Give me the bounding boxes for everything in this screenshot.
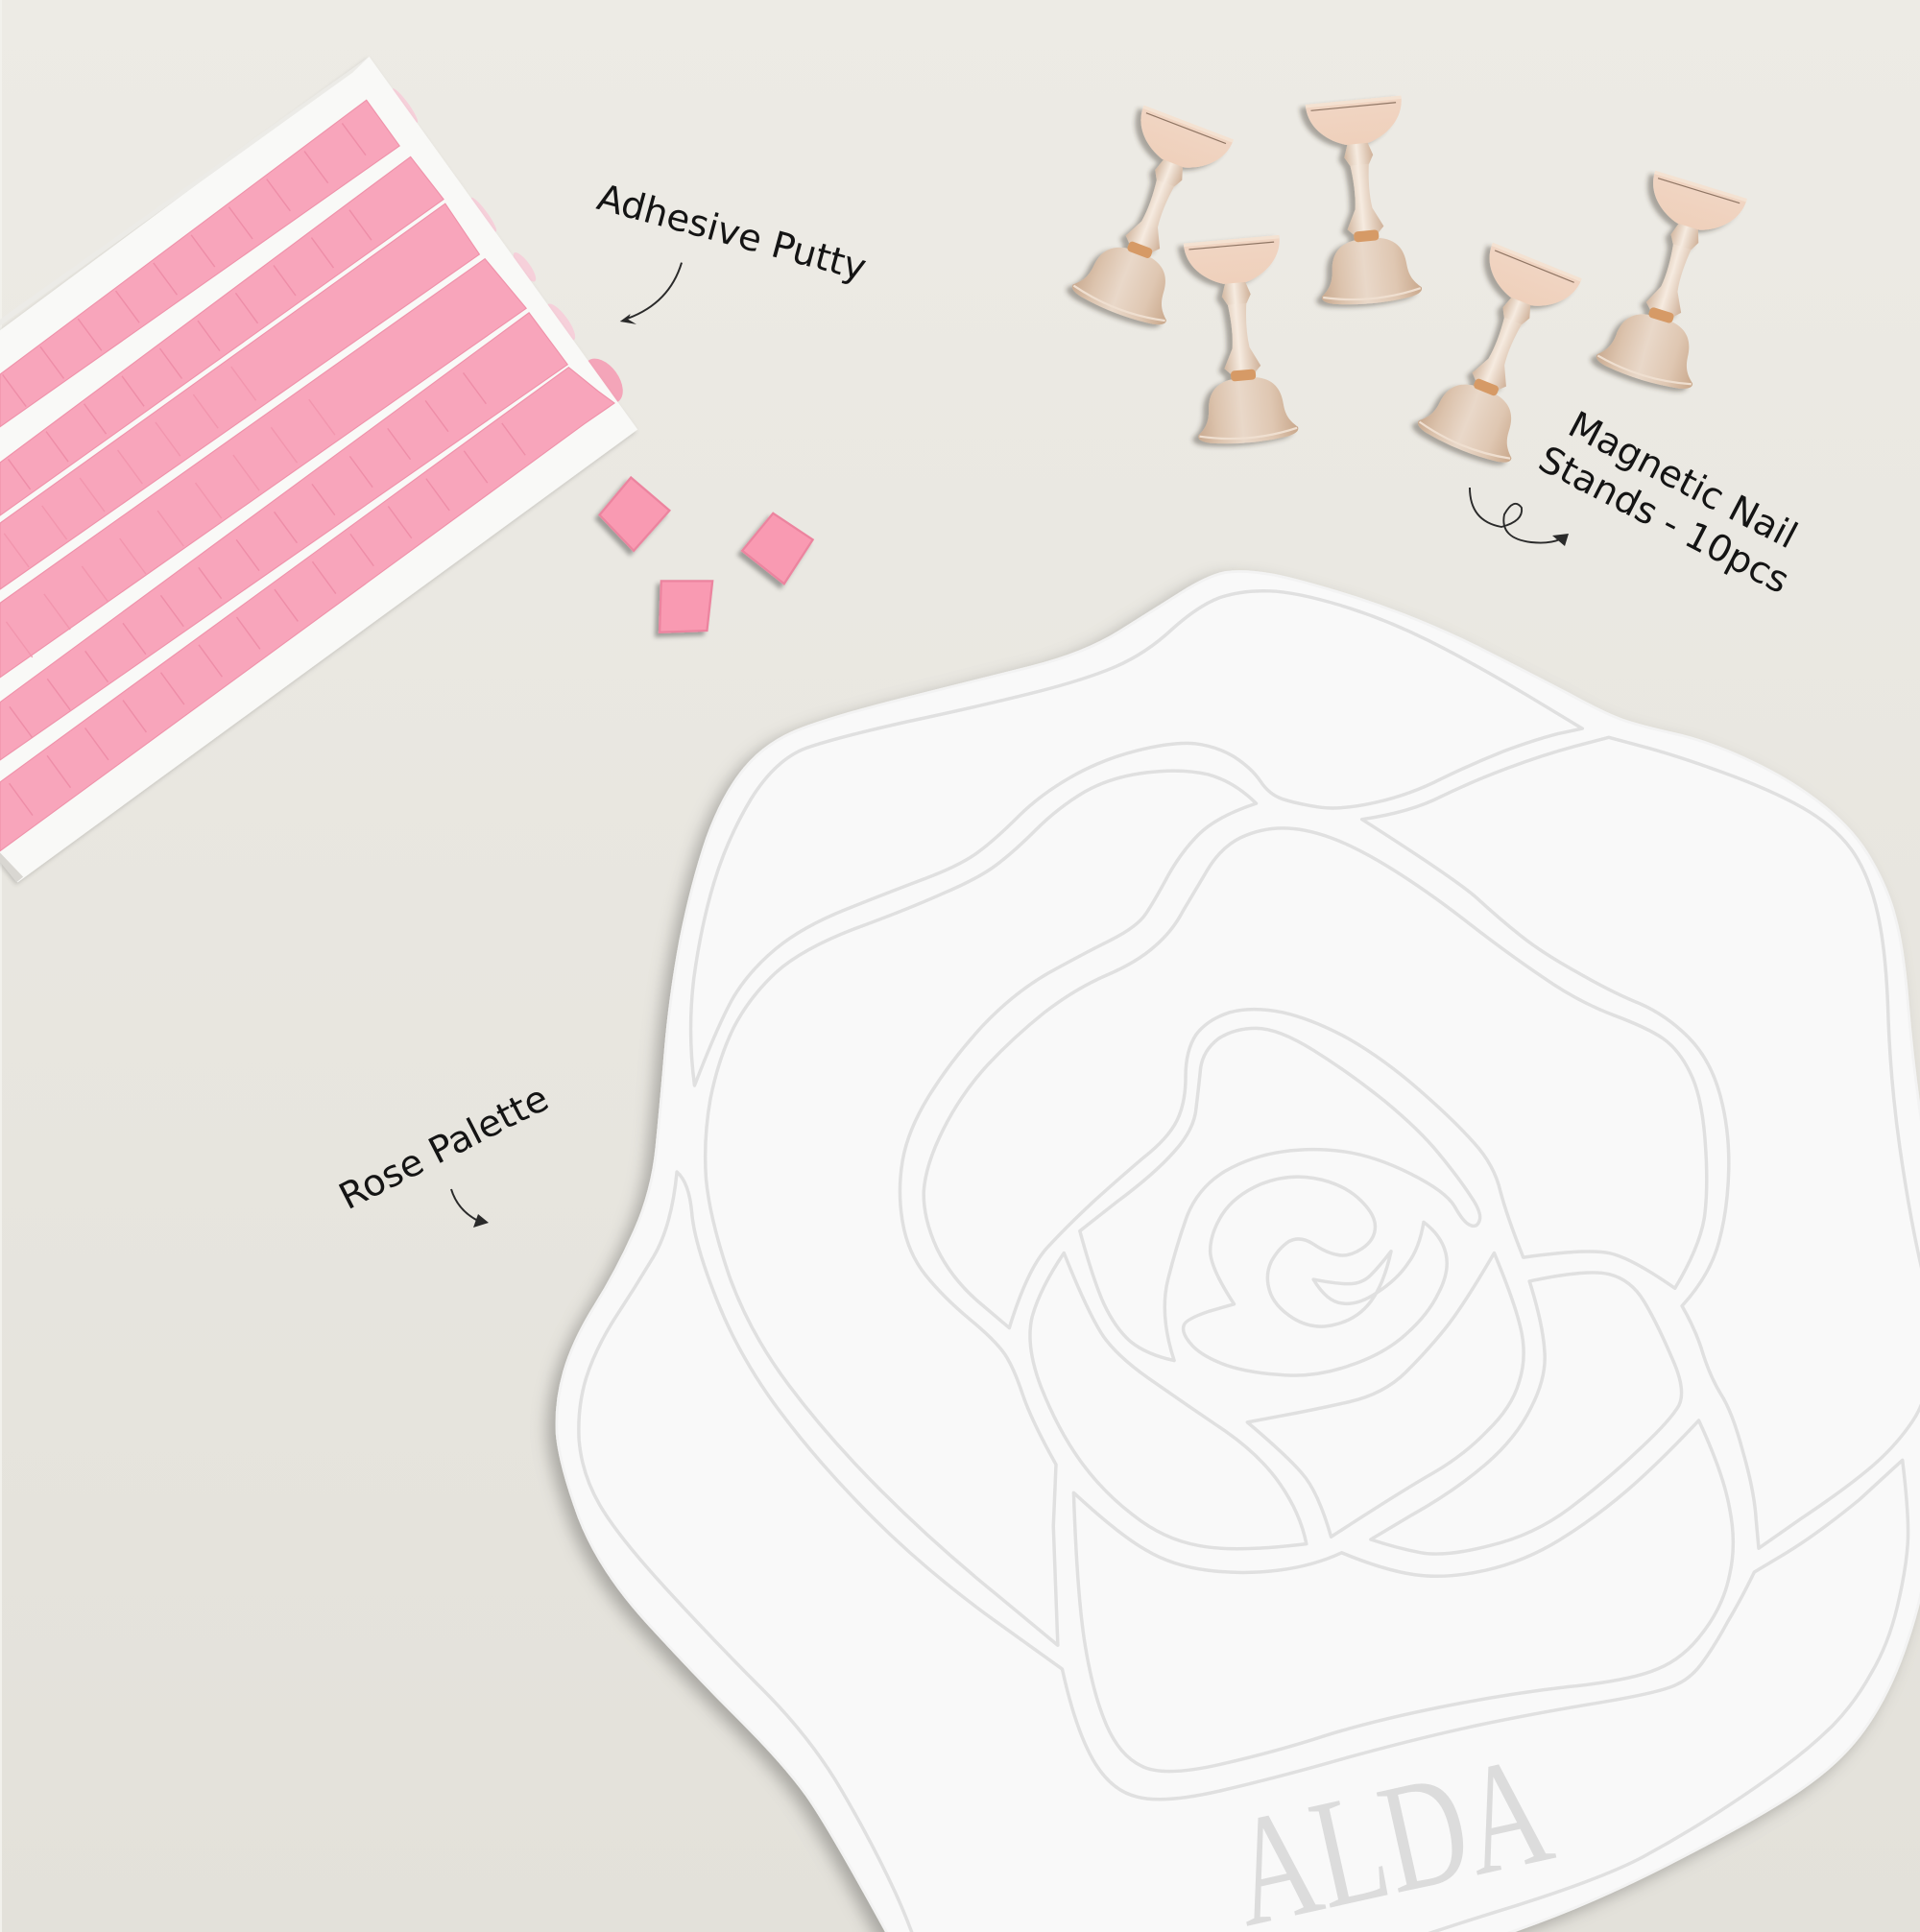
label: magnetic nail stands: Stands - 10pcs (1532, 438, 1796, 602)
panel: adhesive putty sheet (0, 57, 813, 882)
putty strips (0, 100, 614, 851)
stand 5 (1594, 172, 1749, 394)
arrow: adhesive putty (620, 263, 682, 324)
arrow: magnetic nail stands (1470, 488, 1569, 546)
loose putty squares (600, 477, 813, 632)
arrow: rose palette (451, 1189, 489, 1228)
label: rose palette: Rose Palette (332, 1077, 555, 1218)
sheet backing (0, 57, 637, 882)
putty bumps behind the sheet (390, 86, 631, 411)
label: magnetic nail stands: Magnetic Nail (1562, 403, 1804, 557)
label: adhesive putty: Adhesive Putty (593, 176, 871, 289)
panel: magnetic nail stands (1068, 97, 1749, 468)
stand 2 (1304, 97, 1423, 308)
rose line art (579, 591, 1920, 1932)
panel: rose palette (557, 571, 1920, 1932)
putty score lines (13, 138, 549, 799)
stand 3 (1182, 236, 1299, 447)
stand 1 (1068, 106, 1235, 331)
stand 4 (1414, 244, 1583, 468)
palette body (557, 571, 1920, 1932)
